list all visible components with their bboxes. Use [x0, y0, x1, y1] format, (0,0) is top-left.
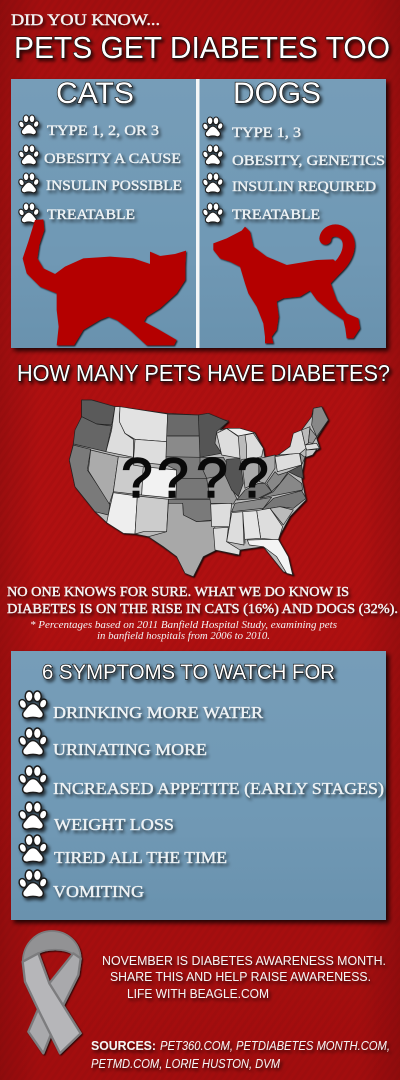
text block: no one knows: NO ONE KNOWS FOR SURE. WHAT WE DO KNOW IS	[7, 585, 349, 600]
cat list: TREATABLE	[47, 207, 135, 223]
divider	[196, 79, 200, 348]
text block: awareness month: SHARE THIS AND HELP RAISE AWARENESS.	[110, 969, 371, 984]
symptom list: DRINKING MORE WATER	[53, 703, 264, 722]
footnote	[30, 620, 337, 642]
panel: symptoms	[11, 651, 386, 920]
question marks: ?	[196, 446, 228, 509]
footnote: * Percentages based on 2011 Banfield Hospital Study, examining pets	[30, 620, 337, 631]
question marks	[121, 446, 269, 509]
map: United States	[69, 400, 328, 577]
icon: cat silhouette	[23, 219, 186, 345]
panel: cats and dogs	[11, 77, 386, 348]
heading: dogs: DOGS	[233, 77, 321, 110]
question marks: ?	[237, 446, 269, 509]
heading: cats: CATS	[56, 77, 134, 110]
heading: symptoms: 6 SYMPTOMS TO WATCH FOR	[42, 661, 335, 684]
symptom list: URINATING MORE	[53, 740, 207, 759]
symptom list: TIRED ALL THE TIME	[54, 848, 227, 867]
icon: awareness ribbon	[23, 931, 81, 1053]
icon: dog silhouette	[213, 227, 360, 343]
text block: no one knows: DIABETES IS ON THE RISE IN CATS (16%) AND DOGS (32%).	[7, 602, 398, 617]
dog list	[202, 117, 385, 223]
text block: awareness month: NOVEMBER IS DIABETES AWARENESS MONTH.	[102, 953, 386, 968]
text block: awareness month: LIFE WITH BEAGLE.COM	[127, 986, 269, 1001]
question marks: ?	[121, 446, 153, 509]
dog list: OBESITY, GENETICS	[232, 153, 385, 169]
cat list: TYPE 1, 2, OR 3	[47, 123, 159, 139]
title: PETS GET DIABETES TOO	[14, 30, 390, 65]
question marks: ?	[157, 446, 189, 509]
symptom list: VOMITING	[53, 882, 144, 901]
dog list: TYPE 1, 3	[232, 125, 301, 141]
sources: SOURCES:	[91, 1038, 156, 1053]
cat list: OBESITY A CAUSE	[44, 151, 181, 167]
cat list	[18, 115, 182, 223]
dog list: INSULIN REQUIRED	[232, 179, 376, 195]
text block: awareness month	[102, 953, 386, 1001]
cat list: INSULIN POSSIBLE	[46, 178, 182, 194]
dog list: TREATABLE	[232, 207, 320, 223]
footnote: in banfield hospitals from 2006 to 2010.	[97, 631, 270, 642]
symptom list: WEIGHT LOSS	[54, 815, 174, 834]
sources	[91, 1038, 390, 1071]
sources: PETMD.COM, LORIE HUSTON, DVM	[91, 1056, 280, 1071]
text block: no one knows	[7, 585, 398, 617]
symptom list	[18, 691, 384, 901]
symptom list: INCREASED APPETITE (EARLY STAGES)	[53, 779, 384, 798]
kicker: did you know: DID YOU KNOW...	[11, 12, 160, 29]
